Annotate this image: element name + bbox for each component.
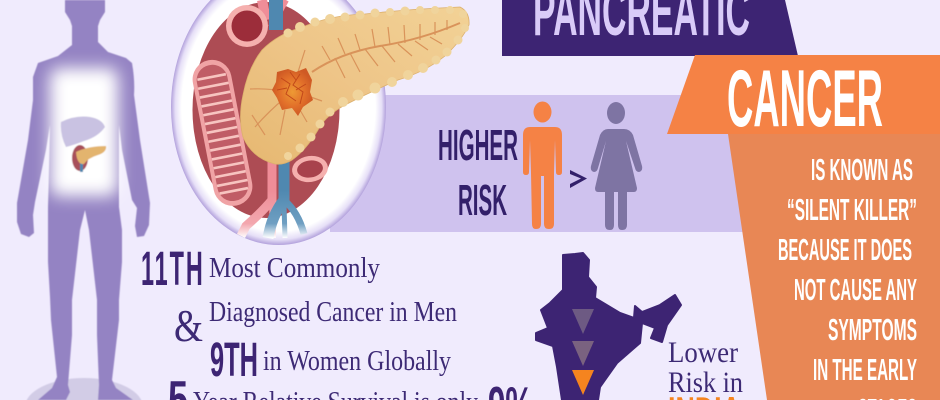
statistic: 5 year survival [168,371,533,400]
statistic: 11th most commonly diagnosed: 11TH [141,243,205,296]
torso glow [50,68,118,196]
pancreatic duct [250,20,460,135]
side panel: silent killer [728,134,940,400]
title banner: PANCREATIC [502,0,798,56]
lower risk in India: Risk in [668,366,743,399]
icon: woman [591,102,642,230]
lower risk in India [668,336,743,400]
statistic: 11th most commonly diagnosed: Diagnosed Cancer in Men [209,297,457,328]
intestine [189,57,256,209]
icon: man [523,102,562,229]
small pancreas [72,145,106,172]
higher risk label: RISK [458,176,507,225]
pancreas body [240,6,469,164]
statistic: 11th most commonly diagnosed: & [174,300,203,351]
risk band [330,95,755,232]
higher risk label [438,121,518,225]
pancreas illustration [171,0,469,245]
organ background [192,2,340,218]
statistic: 11th most commonly diagnosed: 9TH [210,334,258,387]
arrow 2 [572,341,594,366]
human body figure [17,0,150,400]
icon: greater than [570,170,587,188]
vessel cross-section top [226,5,268,47]
statistic: 11th most commonly diagnosed: Most Commonly [209,253,380,284]
vessels [241,0,304,238]
India map [536,253,681,400]
statistic: 11th most commonly diagnosed [141,243,457,387]
arrow 1 [572,309,594,334]
body silhouette [17,0,150,400]
lower risk in India: Lower [668,336,738,369]
arrow 3 [572,370,594,395]
liver [61,117,105,147]
floor shadow ellipse [25,378,143,400]
white circle frame [171,0,386,245]
tumor [272,68,313,116]
vessel cross-section bottom [290,154,330,184]
text: HIGHER [438,121,518,170]
statistic: 11th most commonly diagnosed: in Women Globally [263,346,451,377]
